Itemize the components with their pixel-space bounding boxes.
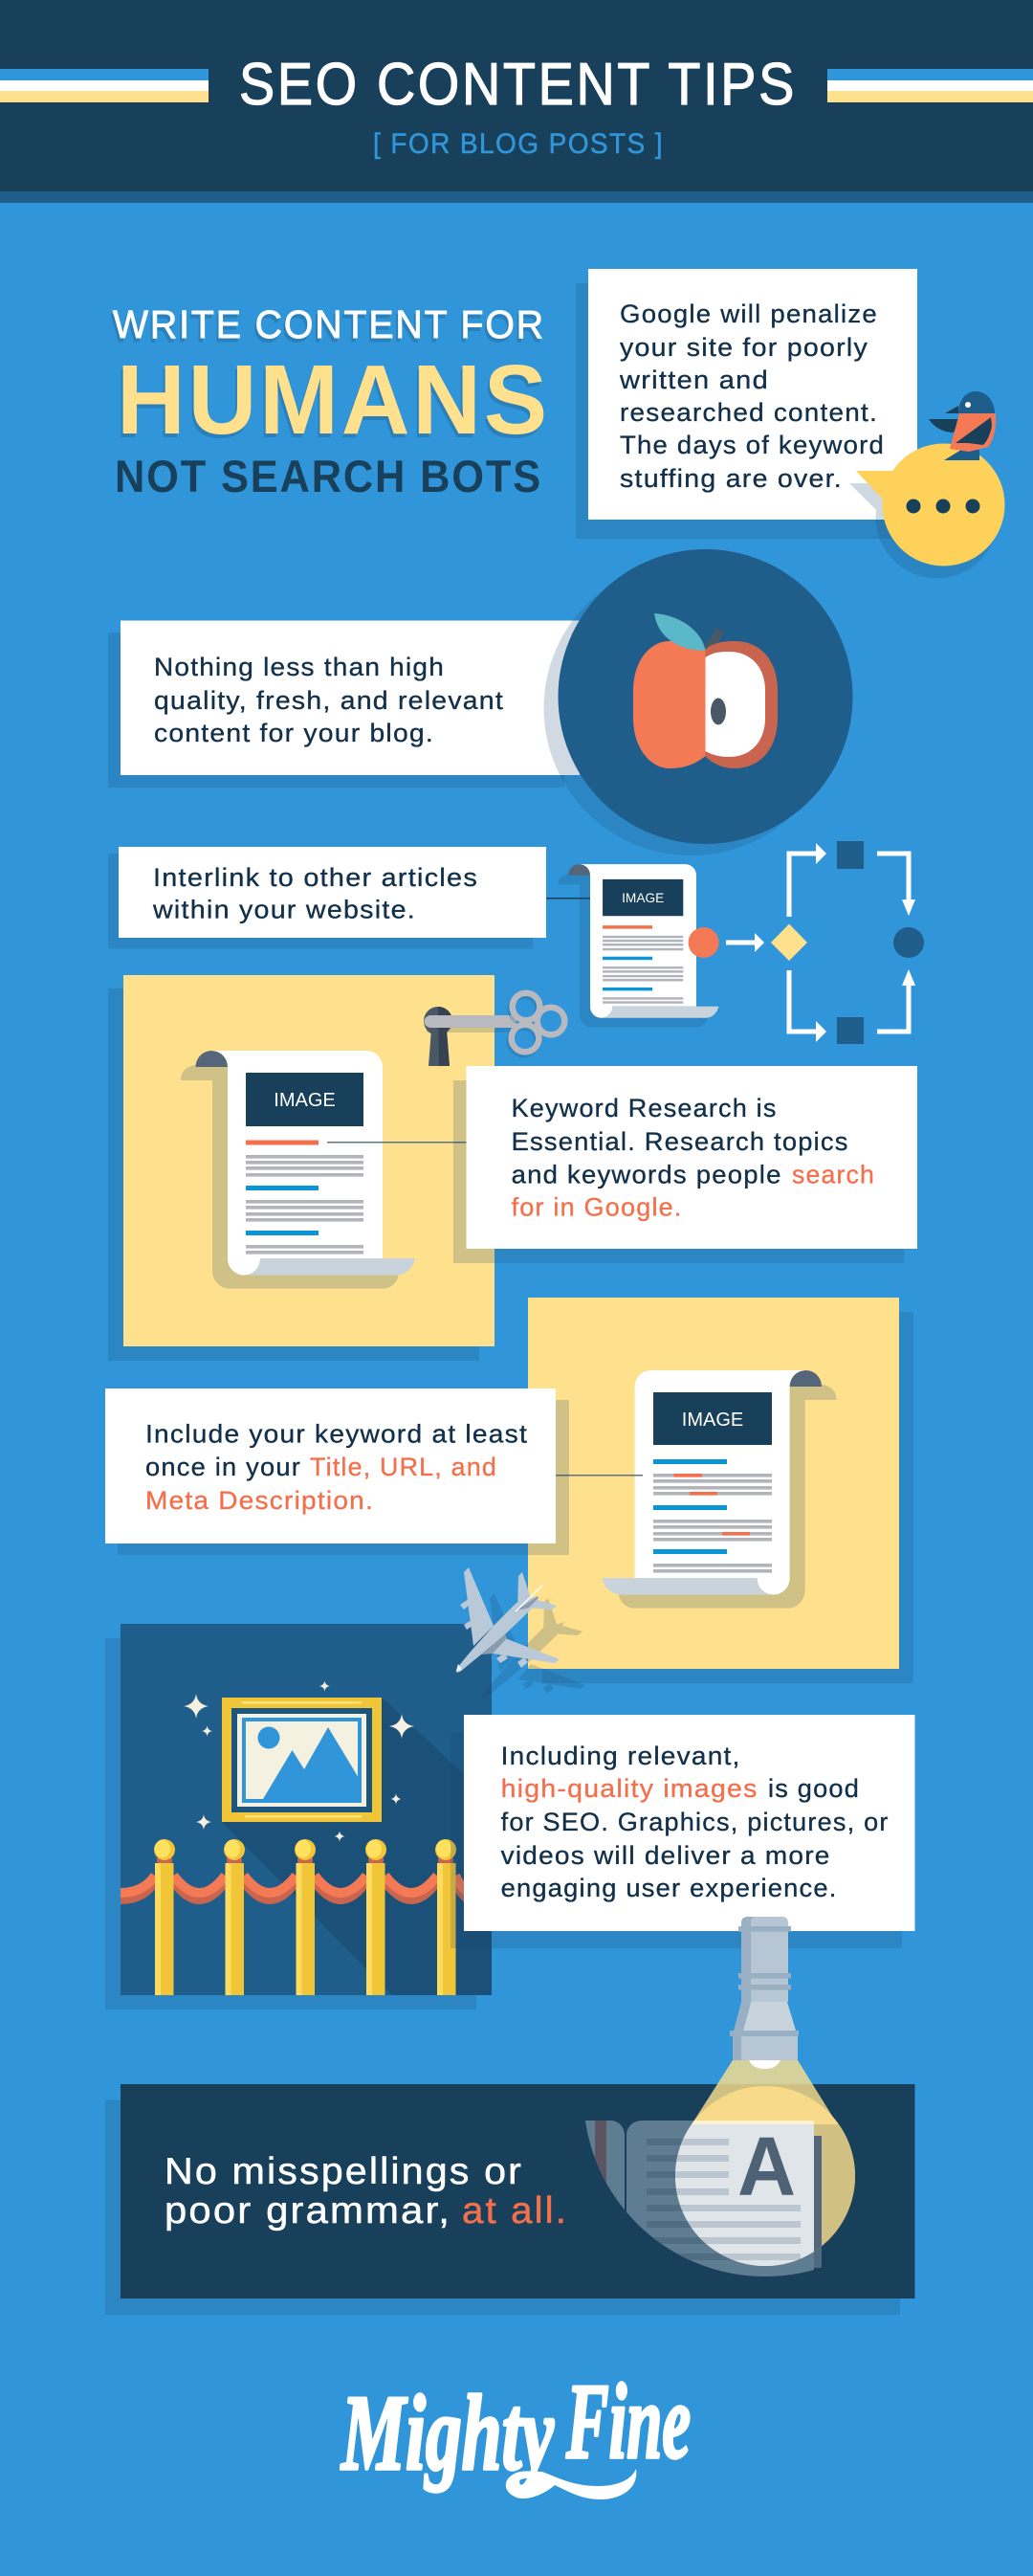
misspellings text: poor grammar, <box>165 2190 451 2232</box>
panel: high-quality images <box>451 1715 914 1948</box>
headline: write content for humans <box>113 302 550 501</box>
headline line 3: NOT SEARCH BOTS <box>115 451 542 501</box>
flow nodes <box>689 841 924 1044</box>
images text <box>501 1742 890 1902</box>
icon: lamp <box>730 1917 799 2069</box>
images text: high-quality images <box>501 1774 758 1803</box>
callout text: stuffing are over. <box>620 464 843 493</box>
keyword text <box>512 1094 875 1221</box>
logo: Mighty Fine: Mighty <box>341 2374 555 2493</box>
spotlit book <box>675 2086 855 2266</box>
logo: Mighty Fine: Fine <box>565 2363 691 2481</box>
include text <box>145 1420 528 1515</box>
panel: yellow document 1 <box>108 975 495 1361</box>
icon: small document: IMAGE <box>622 891 664 905</box>
panel: yellow document 2 <box>528 1298 913 1683</box>
subtitle: [ FOR BLOG POSTS ] <box>373 128 664 160</box>
include text: Title, URL, and <box>310 1453 497 1481</box>
callout text: The days of keyword <box>620 431 885 459</box>
panel: interlink <box>108 847 546 949</box>
panel: google callout <box>576 269 917 539</box>
callout text: Google will penalize <box>620 300 878 328</box>
keyword text: and keywords people <box>512 1160 782 1188</box>
connector line <box>327 1142 467 1143</box>
icon: document: IMAGE <box>682 1410 743 1431</box>
keyword text: Essential. Research topics <box>512 1127 849 1156</box>
posts <box>154 1839 456 1995</box>
icon: key in keyhole <box>424 993 564 1066</box>
flow arrows <box>726 854 909 1032</box>
title: SEO CONTENT TIPS <box>239 52 797 118</box>
panel: quality content <box>108 620 580 788</box>
panel: gallery image <box>105 1624 492 2010</box>
bird <box>929 391 996 460</box>
interlink text: within your website. <box>152 896 416 924</box>
sparkles <box>184 1680 414 1841</box>
misspellings text: No misspellings or <box>165 2151 523 2192</box>
left stripes <box>0 69 209 102</box>
icon: document: IMAGE <box>274 1090 336 1111</box>
dim book <box>585 2121 822 2276</box>
misspellings text <box>165 2151 568 2232</box>
panel: keyword research <box>453 1066 917 1263</box>
callout text <box>619 300 885 493</box>
icon: document <box>181 1051 415 1289</box>
interlink text: Interlink to other articles <box>153 863 478 892</box>
icon: book under spotlight <box>585 2060 855 2276</box>
icon: document <box>603 1370 837 1609</box>
keyword text: Keyword Research is <box>512 1094 778 1122</box>
light beam <box>693 2060 840 2128</box>
keyword text: search <box>792 1160 875 1188</box>
callout text: researched content. <box>620 398 878 427</box>
include text: Include your keyword at least <box>145 1420 528 1449</box>
right stripes <box>827 69 1033 102</box>
connector line <box>556 1475 643 1476</box>
icon: airplane <box>456 1567 585 1699</box>
misspellings text: at all. <box>462 2190 568 2232</box>
icon: apple in circle <box>543 549 853 855</box>
flow diagram <box>689 841 924 1044</box>
headline line 2: HUMANS <box>117 344 550 455</box>
include text: once in your <box>145 1453 301 1481</box>
icon: small document <box>558 864 718 1027</box>
panel: no misspellings <box>105 2084 914 2315</box>
quality text: Nothing less than high <box>154 653 445 681</box>
logo swash <box>506 2469 636 2499</box>
header band <box>0 0 1033 203</box>
images text: Including relevant, <box>501 1742 741 1770</box>
images text: videos will deliver a more <box>501 1841 831 1870</box>
callout text: written and <box>619 366 769 394</box>
connector line <box>546 898 590 899</box>
icon: speech bubble with bird <box>849 391 1004 578</box>
images text: engaging user experience. <box>501 1874 838 1902</box>
keyword text: for in Google. <box>512 1192 683 1221</box>
images text: is good <box>768 1774 860 1803</box>
panel: include keyword <box>105 1388 569 1555</box>
quality text: quality, fresh, and relevant <box>154 686 504 715</box>
framed picture <box>222 1698 382 1822</box>
images text: for SEO. Graphics, pictures, or <box>501 1808 890 1836</box>
interlink text <box>152 863 478 924</box>
rope <box>121 1876 469 1899</box>
quality text: content for your blog. <box>154 719 434 747</box>
callout text: your site for poorly <box>620 333 868 362</box>
letter A: A <box>737 2121 796 2213</box>
include text: Meta Description. <box>145 1486 374 1515</box>
headline line 1: WRITE CONTENT FOR <box>113 302 545 346</box>
quality text <box>154 653 504 747</box>
